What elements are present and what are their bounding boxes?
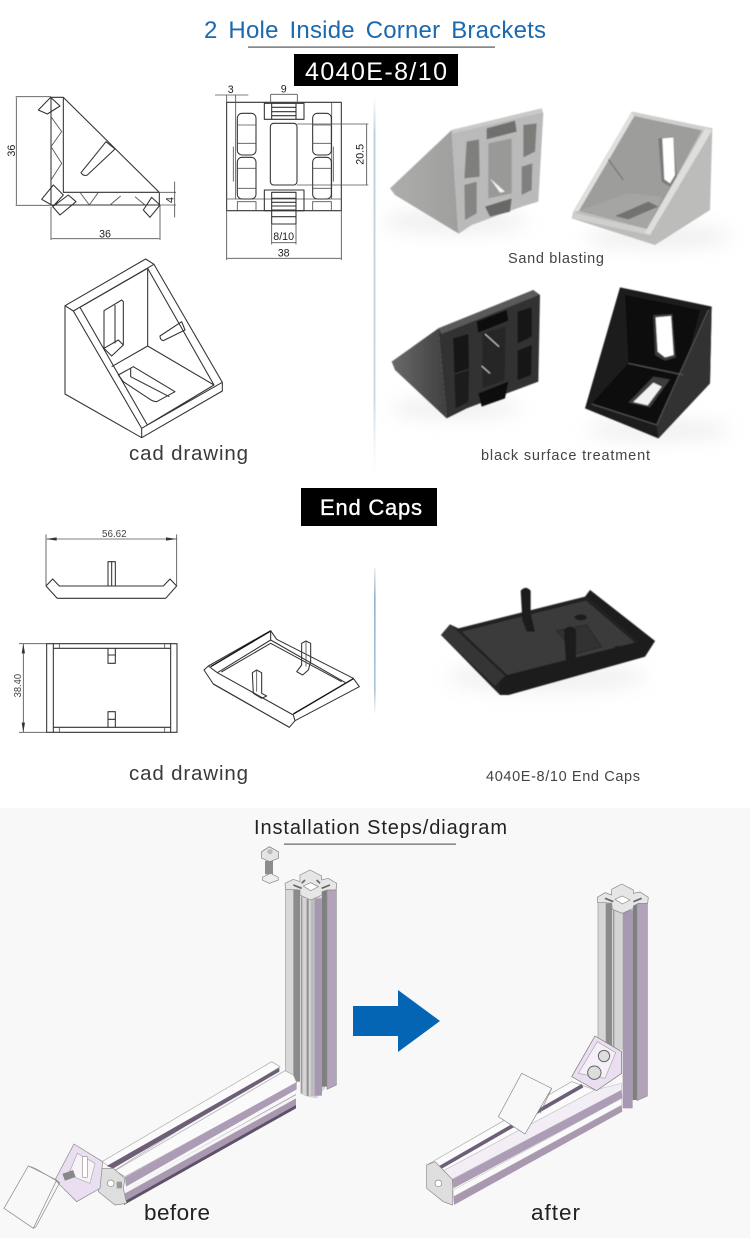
diagram: bracket front view with dimensions: 20.5 xyxy=(354,144,366,165)
diagram: bracket front view with dimensions: 9 xyxy=(281,84,287,96)
diagram: end cap plan view with dimension xyxy=(13,644,177,732)
installed corner bracket xyxy=(572,1036,622,1091)
bracket cover xyxy=(498,1073,552,1134)
photo: black end cap xyxy=(441,588,655,695)
vertical extrusion xyxy=(597,884,648,1108)
diagram: bracket front view with dimensions: 8/10 xyxy=(273,231,294,243)
horizontal extrusion xyxy=(98,1062,297,1205)
diagram: bracket side view with dimensions: 36 xyxy=(99,228,111,240)
bracket cover xyxy=(4,1166,60,1228)
icon: t-nut bolt xyxy=(262,847,278,883)
divider: upper panels xyxy=(374,95,376,475)
caption: end caps model: 4040E-8/10 End Caps xyxy=(486,769,640,785)
arrow xyxy=(353,990,440,1052)
divider: end caps panels xyxy=(374,568,376,713)
caption: cad drawing: cad drawing xyxy=(129,442,248,465)
photo: sand blasted bracket back xyxy=(382,108,543,234)
diagram: bracket side view with dimensions: 36 xyxy=(6,145,18,157)
diagram: end cap top view with dimension: 56.62 xyxy=(102,529,127,540)
corner bracket exploded xyxy=(55,1144,103,1202)
photo: black bracket back xyxy=(388,290,540,418)
diagram: bracket isometric cad drawing xyxy=(65,259,222,438)
photo: sand blasted brackets xyxy=(382,108,732,248)
diagram: bracket side view with dimensions xyxy=(6,97,176,240)
diagram: after assembly xyxy=(427,884,648,1205)
photo: sand blasted bracket front xyxy=(572,112,732,248)
heading: end caps xyxy=(301,488,437,526)
caption: before: before xyxy=(144,1200,210,1225)
diagram: bracket side view with dimensions: 4 xyxy=(164,197,176,203)
diagram: bracket front view with dimensions: 38 xyxy=(278,248,290,260)
diagram: before assembly xyxy=(4,847,337,1228)
diagram: bracket front view with dimensions: 3 xyxy=(228,84,234,96)
photo: black bracket front xyxy=(585,287,732,440)
vertical extrusion xyxy=(285,870,337,1098)
caption: sand blasting: Sand blasting xyxy=(508,251,604,267)
caption: after: after xyxy=(531,1200,580,1225)
caption: cad drawing end caps: cad drawing xyxy=(129,762,248,785)
diagram: end cap plan view with dimension: 38.40 xyxy=(13,674,24,697)
heading: end caps: End Caps xyxy=(320,495,422,520)
diagram: end cap isometric view xyxy=(204,631,359,727)
heading: model number: 4040E-8/10 xyxy=(305,58,447,86)
heading: installation steps: Installation Steps/diagram xyxy=(254,817,507,839)
horizontal extrusion xyxy=(427,1082,622,1205)
diagram: end cap top view with dimension xyxy=(46,529,177,598)
diagram: bracket front view with dimensions xyxy=(215,84,368,260)
caption: black surface treatment: black surface treatment xyxy=(481,448,650,464)
photo: black brackets xyxy=(388,287,732,440)
title: 2 Hole Inside Corner Brackets xyxy=(204,17,546,44)
panel: installation steps xyxy=(0,808,750,1238)
